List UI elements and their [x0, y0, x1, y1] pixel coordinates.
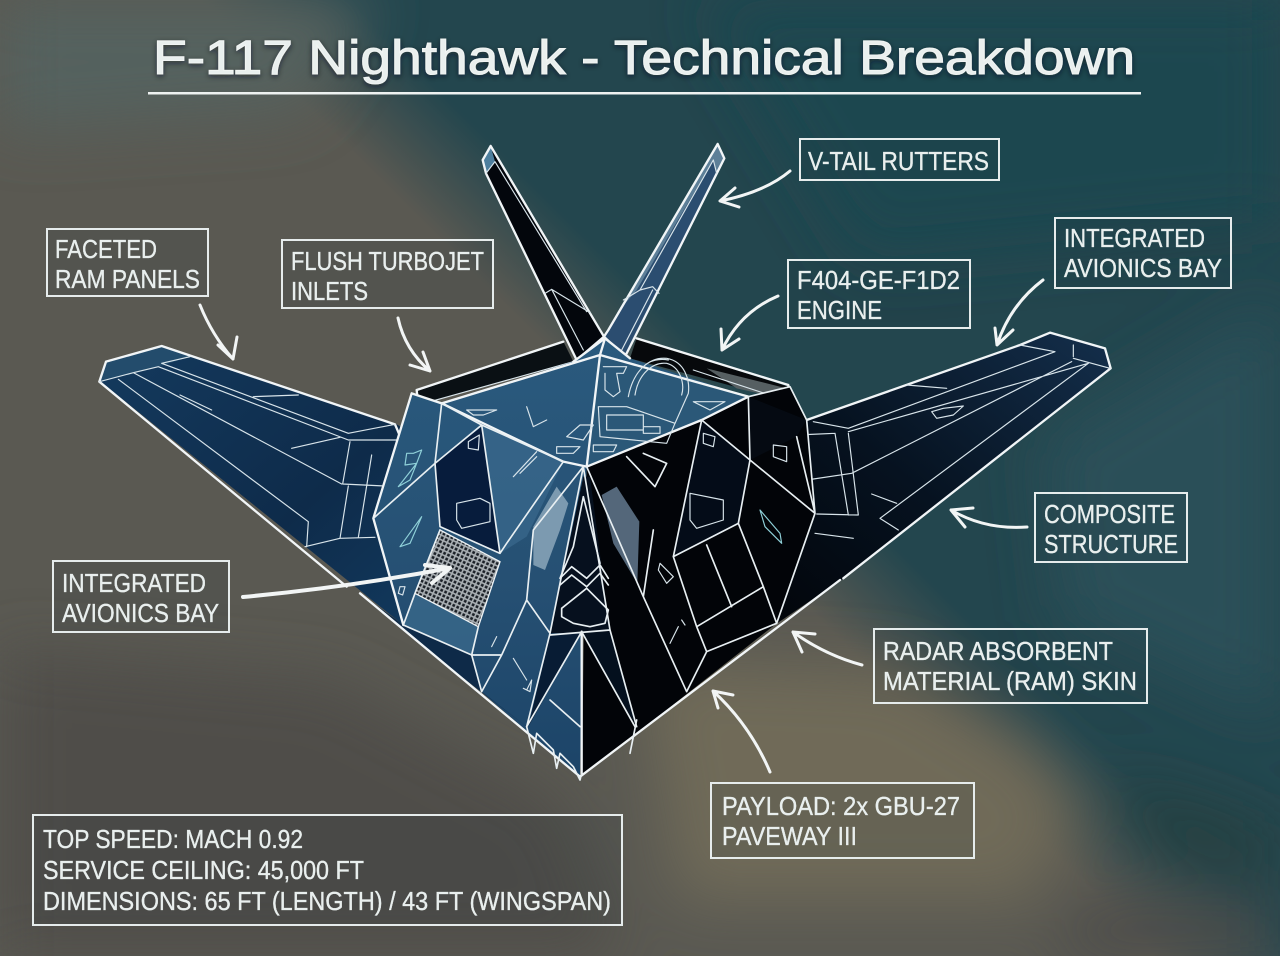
label: composite structure: COMPOSITE [1044, 499, 1175, 529]
label: composite structure: STRUCTURE [1044, 529, 1178, 559]
label: integrated avionics bay (left): AVIONICS BAY [62, 598, 219, 628]
tail fins [483, 144, 724, 360]
arrow: V-tail rudders [720, 171, 790, 207]
label: V-tail rudders: V-TAIL RUTTERS [808, 146, 989, 176]
label: radar absorbent material skin: MATERIAL (RAM) SKIN [883, 666, 1137, 696]
label: flush turbojet inlets: INLETS [291, 276, 368, 306]
arrow: integrated avionics bay (right) [995, 280, 1043, 345]
arrow: faceted RAM panels [200, 305, 237, 359]
title: F-117 Nighthawk - Technical Breakdown [153, 32, 1135, 85]
aircraft illustration [99, 144, 1111, 780]
specifications panel: TOP SPEED: MACH 0.92 [43, 824, 303, 854]
arrow: radar absorbent skin [793, 632, 862, 665]
arrow: F404 engine [721, 296, 778, 350]
arrow: composite structure [951, 508, 1027, 527]
panel lines [360, 338, 840, 777]
label: radar absorbent material skin: RADAR ABSORBENT [883, 636, 1113, 666]
specifications panel [33, 815, 622, 925]
label: flush turbojet inlets: FLUSH TURBOJET [291, 246, 484, 276]
label: F404 engine: F404-GE-F1D2 [797, 265, 960, 295]
label: flush turbojet inlets [282, 240, 493, 308]
small access hatches [457, 433, 787, 528]
label: payload [711, 783, 974, 858]
engine inlets [417, 338, 791, 405]
arrow: flush turbojet inlets [398, 318, 430, 371]
arrow: payload [713, 691, 770, 772]
nose spikes [527, 720, 637, 780]
label: integrated avionics bay (right): AVIONICS BAY [1064, 253, 1222, 283]
window panels [533, 487, 639, 583]
label: integrated avionics bay (left): INTEGRATED [62, 568, 206, 598]
label: F404 engine: ENGINE [797, 295, 882, 325]
label: integrated avionics bay (right): INTEGRATED [1064, 223, 1205, 253]
label: faceted RAM panels [47, 229, 208, 296]
fuselage [360, 338, 840, 780]
cockpit detail sketch [398, 358, 782, 692]
specifications panel: SERVICE CEILING: 45,000 FT [43, 855, 364, 885]
specifications panel: DIMENSIONS: 65 FT (LENGTH) / 43 FT (WINGSPAN) [43, 886, 611, 916]
avionics grid panel [415, 530, 500, 627]
label: integrated avionics bay (right) [1055, 218, 1231, 288]
fuselage left lit half [373, 338, 748, 777]
left wing [99, 346, 423, 630]
right wing [767, 333, 1111, 623]
label: faceted RAM panels: RAM PANELS [55, 264, 200, 294]
label: payload: PAYLOAD: 2x GBU-27 [722, 791, 960, 821]
label: V-tail rudders [800, 139, 999, 180]
label: faceted RAM panels: FACETED [55, 234, 157, 264]
arrow: integrated avionics bay (left) [243, 565, 450, 597]
label: payload: PAVEWAY III [722, 821, 857, 851]
label: radar absorbent material skin [874, 629, 1147, 703]
fuselage right dark half [582, 387, 815, 777]
label: integrated avionics bay (left) [53, 561, 229, 632]
nose zigzag and sensor [560, 497, 608, 627]
dark panels [360, 355, 807, 727]
label: composite structure [1035, 493, 1187, 562]
label: F404 engine [788, 260, 970, 328]
